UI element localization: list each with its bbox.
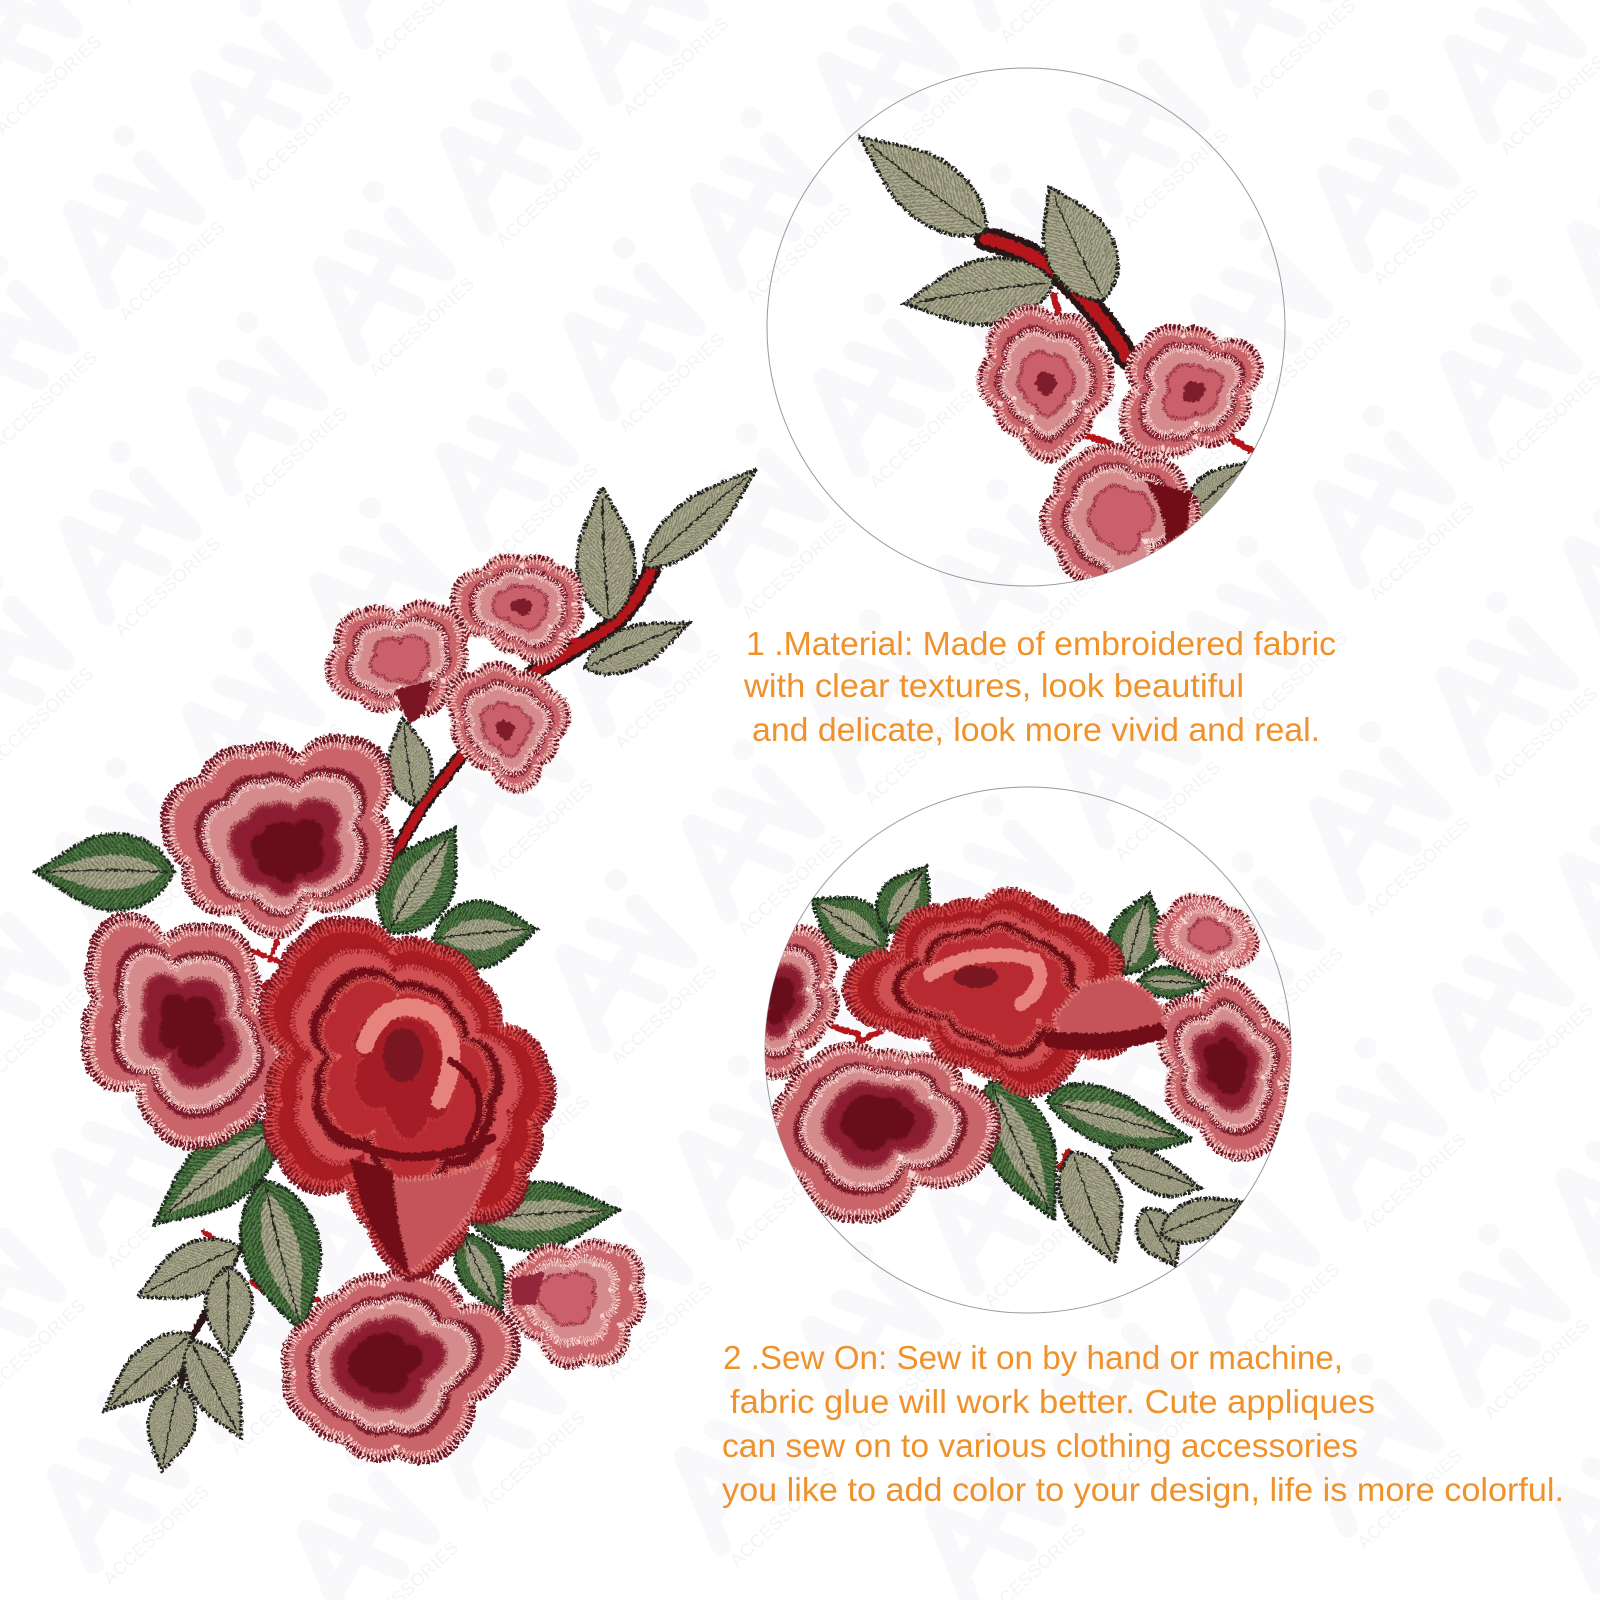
leaf: khaki lower 1 [126, 1224, 250, 1320]
text: material: with clear textures, look beautiful [743, 668, 1244, 705]
text: sew on [722, 1340, 1564, 1509]
leaf: lower left green [133, 1100, 300, 1250]
flower 3 [1038, 442, 1203, 581]
dark base [512, 1272, 545, 1305]
rose center spot [954, 966, 998, 988]
panel: circle detail 2 [727, 787, 1297, 1313]
flower: bottom large [767, 1044, 998, 1221]
rose maroon crescent [352, 1160, 410, 1276]
rose lower fold [330, 1128, 492, 1157]
lower left branch [179, 1250, 239, 1390]
flower: small top right [1155, 896, 1257, 977]
flower: bottom large pink [283, 1269, 518, 1462]
flower 2 [1121, 326, 1261, 456]
text: sew on: 2 .Sew On: Sew it on by hand or machine, [723, 1340, 1343, 1377]
leaf: small khaki [381, 715, 437, 808]
leaf d [1138, 966, 1208, 999]
connectors [1054, 295, 1254, 482]
flower: central rose [844, 889, 1165, 1095]
text: material [743, 626, 1336, 749]
flower: small left [327, 602, 467, 725]
leaf: bottom right green [467, 1177, 622, 1253]
panel: circle detail 1 [767, 68, 1285, 607]
leaf e [983, 1079, 1059, 1221]
leaf: right green [430, 896, 540, 972]
text: material: 1 .Material: Made of embroidered fabric [746, 626, 1336, 663]
flower: left large pink [83, 914, 287, 1148]
rose center spot [383, 1028, 423, 1082]
leaf b [874, 863, 932, 934]
rose tail [372, 1160, 492, 1274]
leaf: khaki lower 5 [139, 1380, 202, 1475]
text: sew on: fabric glue will work better. Cute appliques [730, 1384, 1375, 1421]
leaf h [1108, 1143, 1206, 1199]
leaf: khaki lower 4 [170, 1330, 262, 1449]
flower: right [1157, 977, 1297, 1159]
flower: bottom right small [506, 1241, 644, 1367]
connectors [833, 1027, 1130, 1168]
upper stem [532, 570, 652, 674]
leaf C [900, 256, 1055, 328]
flower: central red rose [260, 918, 554, 1280]
leaf: khaki lower 2 [206, 1267, 252, 1358]
text: sew on: you like to add color to your design, life is more colorful. [722, 1472, 1564, 1509]
leaf j [1134, 1206, 1181, 1268]
rose inner salmon arc [365, 1007, 451, 1100]
flower: small middle [448, 663, 569, 792]
leaf B [1040, 185, 1120, 302]
leaf: left green [35, 834, 174, 910]
leaf c [1106, 890, 1162, 976]
leaf f [1044, 1080, 1193, 1152]
leaf a [810, 895, 890, 960]
leaf: top khaki [573, 486, 638, 622]
circle outline 1 [767, 68, 1285, 586]
rose tail [1054, 977, 1165, 1045]
calyx [395, 680, 432, 725]
leaf A [856, 134, 989, 238]
flower: small top [453, 556, 582, 662]
text: material: and delicate, look more vivid and real. [752, 712, 1320, 749]
circle outline 2 [765, 787, 1291, 1313]
lower stem [204, 596, 590, 1300]
text: sew on: can sew on to various clothing accessories [722, 1428, 1358, 1465]
flower: upper large pink [162, 736, 393, 937]
leaf: top right khaki [629, 452, 771, 584]
leaf: small green [443, 1224, 522, 1324]
rose maroon band [1052, 1032, 1158, 1042]
leaf: lower green [227, 1170, 340, 1344]
rose inner salmon arc [930, 955, 1040, 1005]
flower 3 calyx [1147, 482, 1190, 540]
rose right lobe arc [450, 1060, 480, 1140]
flower: left clipped [765, 924, 841, 1081]
stem [986, 239, 1126, 357]
main rose applique [35, 452, 771, 1475]
leaf i [1158, 1196, 1244, 1246]
leaf g [1056, 1150, 1124, 1264]
leaf lower right [1190, 460, 1248, 518]
leaf: right khaki [577, 604, 697, 687]
flower 1 [979, 306, 1112, 461]
red connectors [245, 920, 288, 996]
leaf: upper green [358, 809, 485, 951]
leaf: khaki lower 3 [89, 1317, 206, 1428]
